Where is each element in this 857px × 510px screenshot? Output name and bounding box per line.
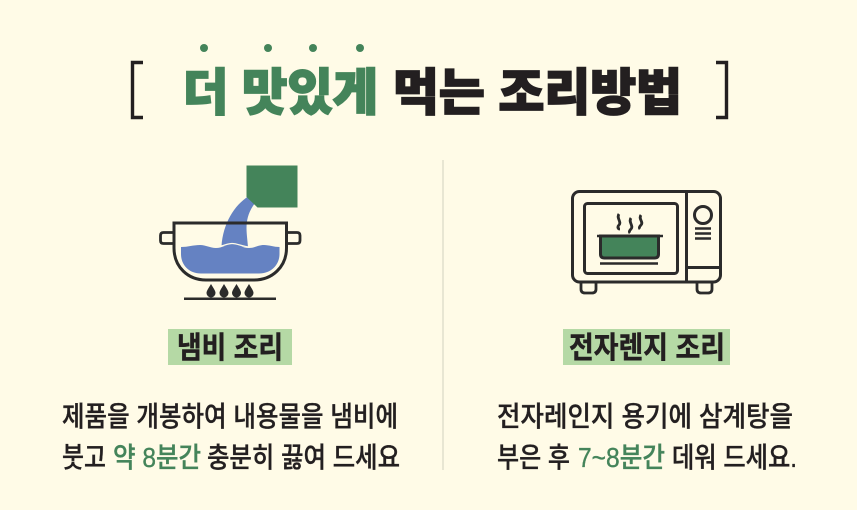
heading: pot cooking: 냄비 조리 [177, 332, 283, 365]
heading: microwave cooking: 전자렌지 조리 [569, 332, 725, 365]
left handle [160, 232, 174, 244]
icon: pot on stove with pouch [160, 166, 300, 300]
left bracket [132, 62, 143, 118]
title [132, 44, 726, 121]
panel: microwave cooking [497, 192, 797, 473]
bowl [600, 236, 658, 258]
text block: microwave instructions: 데워 드세요. [672, 442, 797, 473]
title green part: 더 맛있게 [183, 65, 378, 121]
microwave body [572, 192, 720, 282]
divider [442, 160, 444, 470]
right bracket [716, 62, 726, 118]
pouch [246, 166, 298, 208]
text block: pot instructions: 붓고 [62, 442, 106, 473]
right handle [286, 232, 300, 244]
panel: pot cooking [62, 166, 400, 473]
water highlight [217, 244, 250, 247]
feet [581, 282, 712, 293]
emphasis dots [200, 44, 364, 52]
text block: pot instructions: 충분히 끓여 드세요 [207, 442, 400, 473]
burner line [184, 298, 276, 300]
stream [222, 196, 255, 247]
title dark part: 먹는 조리방법 [393, 65, 682, 121]
text block: microwave instructions: 7~8분간 [578, 442, 665, 473]
icon: microwave [572, 192, 720, 293]
window [584, 204, 678, 274]
flames [206, 284, 254, 298]
text block: microwave instructions [497, 401, 797, 473]
pot body [174, 223, 286, 280]
control lines [695, 228, 711, 238]
text block: pot instructions: 제품을 개봉하여 내용물을 냄비에 [62, 401, 398, 432]
steam [618, 214, 642, 233]
text block: microwave instructions: 전자레인지 용기에 삼계탕을 [497, 401, 793, 432]
knob [694, 206, 712, 224]
water [181, 244, 280, 274]
text block: pot instructions [62, 401, 400, 473]
text block: pot instructions: 약 8분간 [113, 442, 201, 473]
text block: microwave instructions: 부은 후 [497, 442, 570, 473]
